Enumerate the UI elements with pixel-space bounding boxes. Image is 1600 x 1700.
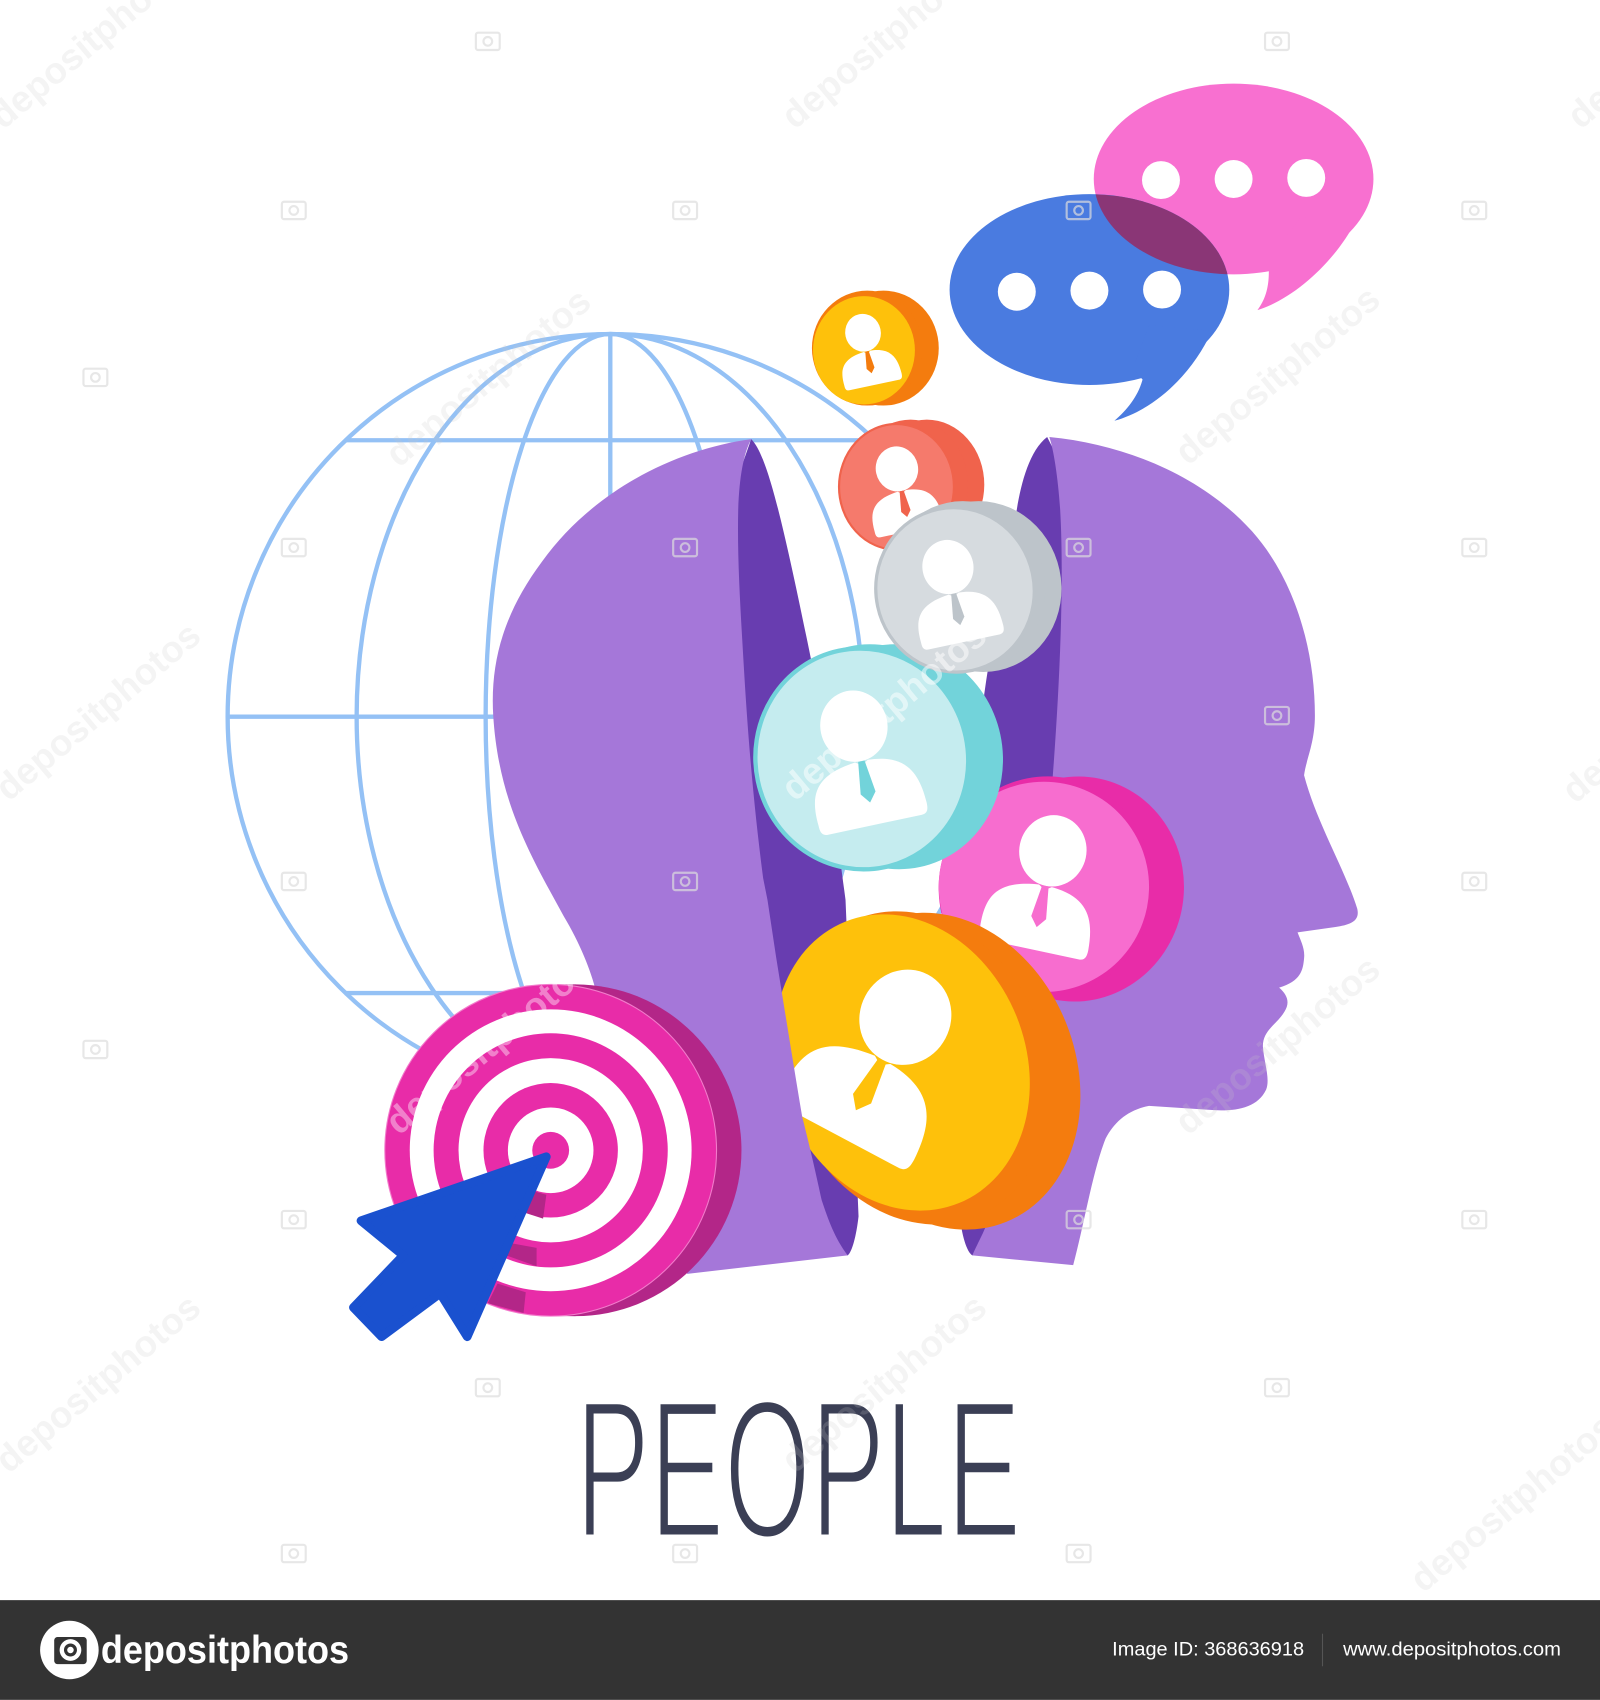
icon: gray person coin [860, 486, 1077, 687]
watermark text: depositphotos [378, 948, 598, 1142]
footer logo [40, 1621, 349, 1679]
icon: wireframe globe [228, 333, 993, 1100]
head: dark inner right strip [943, 437, 1079, 1255]
head: dark inner left strip [726, 439, 859, 1255]
icon: coral person coin [839, 420, 984, 550]
head: left half [493, 439, 848, 1274]
watermark text: depositphotos [378, 280, 598, 475]
watermark camera marks [83, 33, 1486, 1562]
icon: yellow person coin [812, 291, 939, 406]
footer bar [0, 1600, 1600, 1700]
icon: pink speech bubble [1094, 84, 1373, 310]
icon: target with rings [385, 984, 741, 1316]
icon: large orange person coin [730, 870, 1127, 1271]
footer logo: depositphotos [101, 1629, 349, 1672]
icon: blue cursor arrow [353, 1157, 546, 1337]
watermark text: depositphotos [1167, 278, 1388, 472]
watermark text: depositphotos [773, 1286, 994, 1481]
icon: blue speech bubble [950, 194, 1229, 421]
icon: teal person coin [735, 624, 1024, 889]
watermark text: depositphotos [1167, 948, 1388, 1142]
footer image id: Image ID: 368636918 [1112, 1638, 1304, 1660]
icon: pink person coin [918, 756, 1205, 1022]
watermark text: depositphotos [773, 614, 994, 808]
footer website: www.depositphotos.com [1342, 1638, 1561, 1660]
head: right half with face profile [972, 437, 1358, 1265]
title: PEOPLE [576, 1358, 1021, 1579]
